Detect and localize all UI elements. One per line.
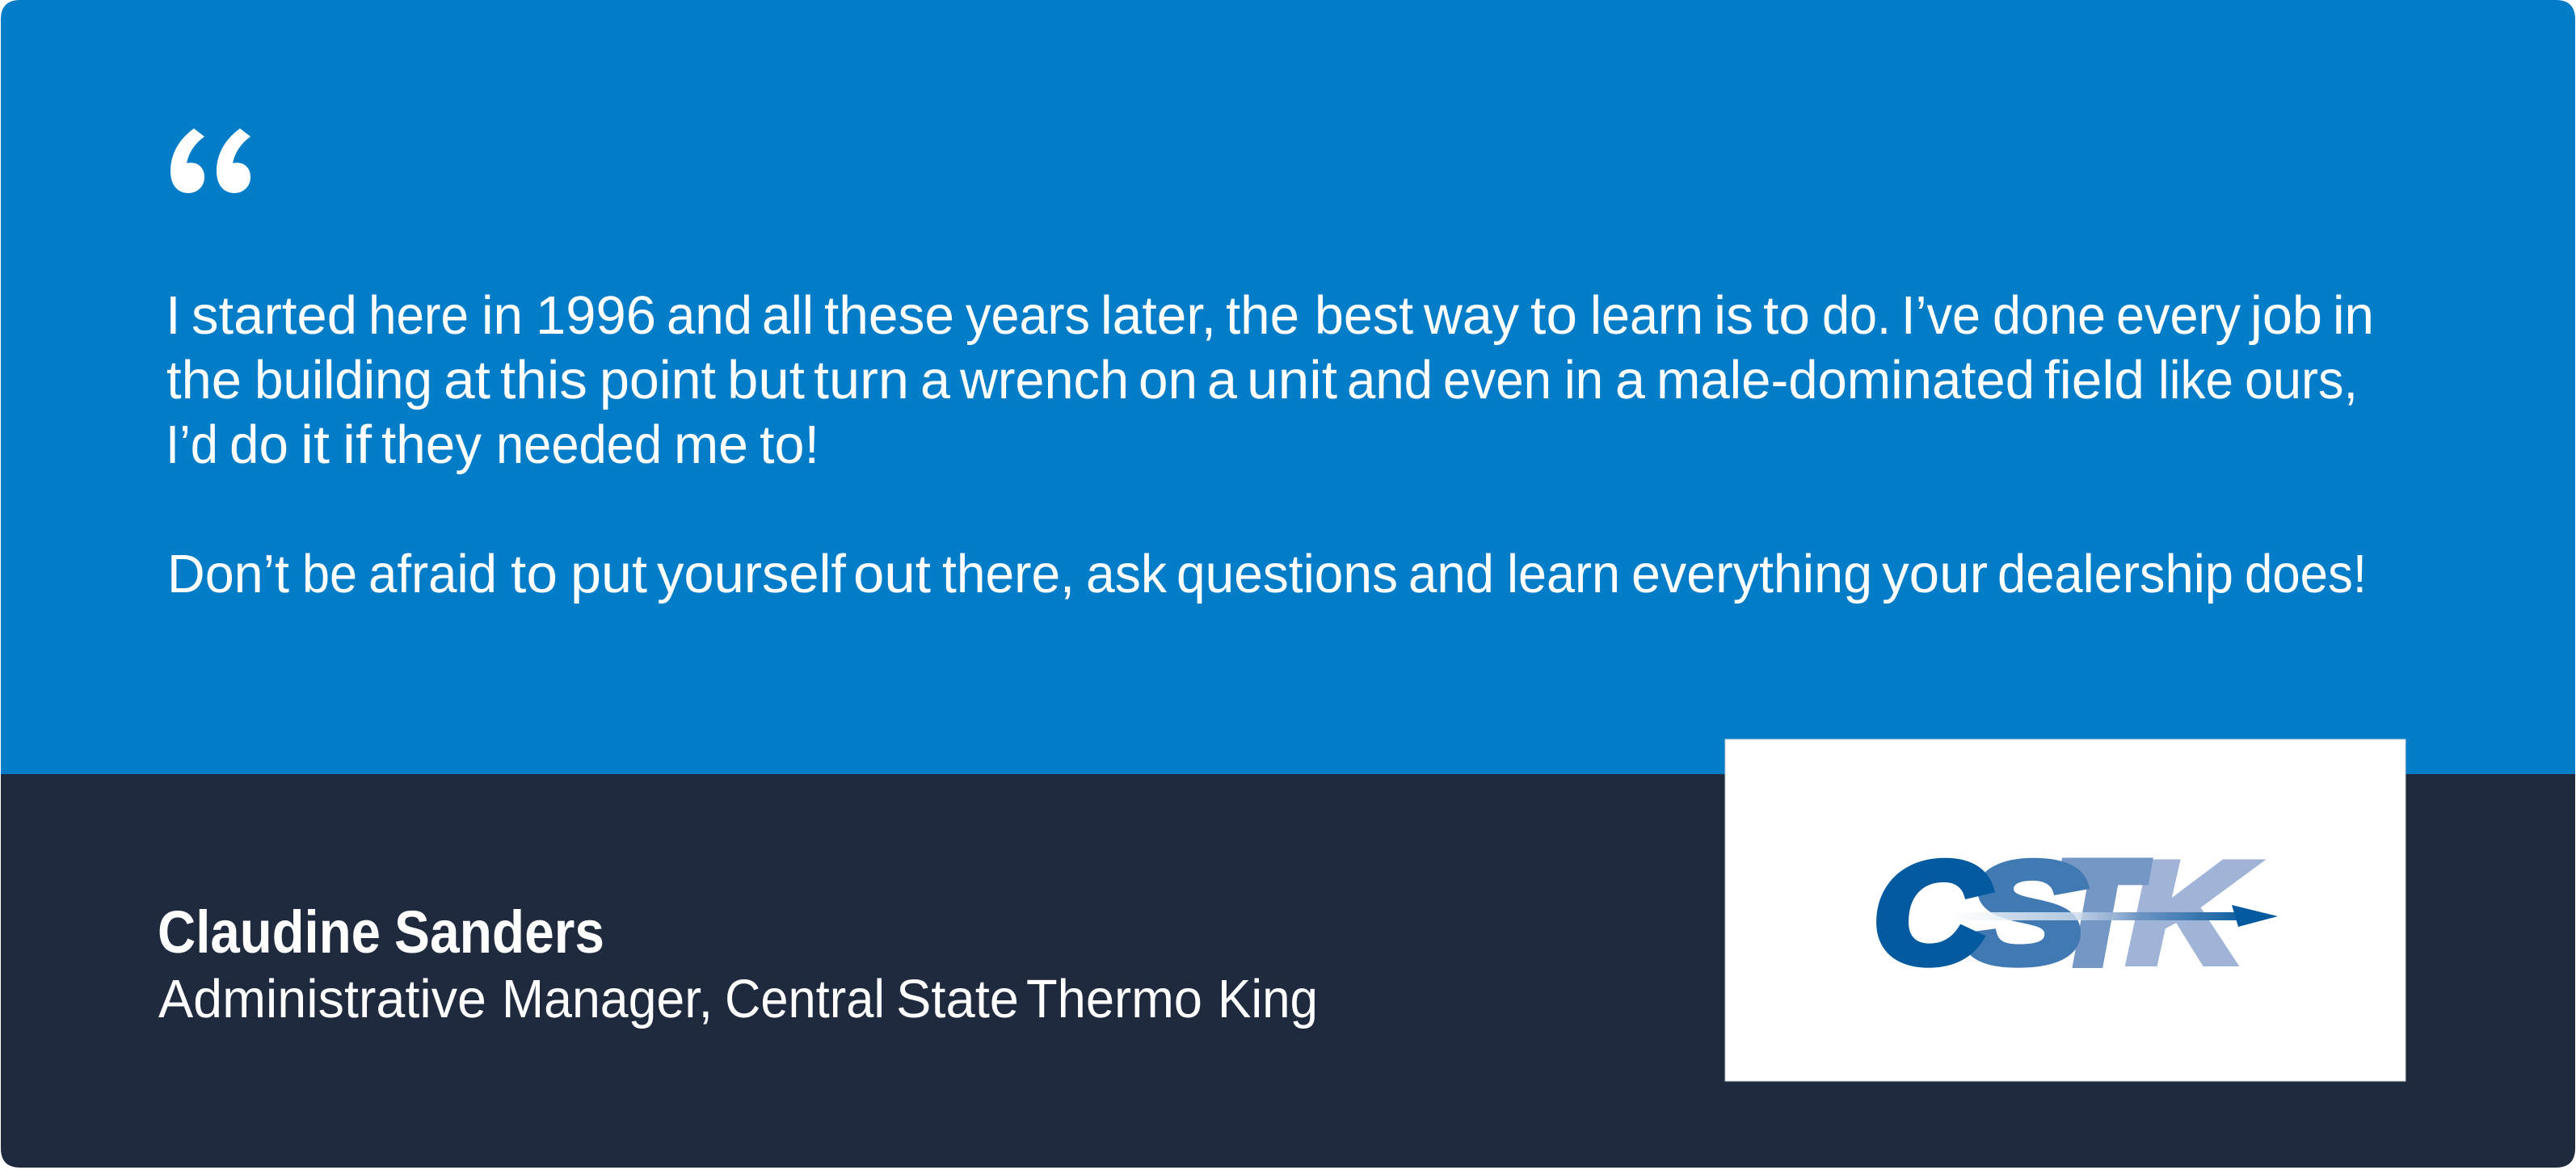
quote paragraph one: in <box>482 285 523 346</box>
quote paragraph one: here <box>368 285 469 346</box>
quote paragraph one: do. <box>1822 285 1891 346</box>
person job title: Administrative <box>158 969 486 1029</box>
quote paragraph one: way <box>1423 285 1519 346</box>
panel: quote background <box>1 0 2575 774</box>
quote paragraph one: learn <box>1590 285 1703 346</box>
quote paragraph one <box>166 285 2374 475</box>
quote paragraph one: a <box>920 350 951 410</box>
quote paragraph one: job <box>2249 285 2322 346</box>
quote paragraph one: I’ve <box>1901 285 1980 346</box>
quote paragraph two: ask <box>1086 544 1167 604</box>
quote paragraph one: field <box>2044 350 2145 410</box>
quote paragraph one: and <box>1347 350 1433 410</box>
logo: CSTK wordmark: S <box>1964 832 2086 993</box>
person name: Claudine <box>158 899 381 966</box>
quote paragraph two: afraid <box>368 544 497 604</box>
quote paragraph one: it <box>301 415 330 475</box>
quote paragraph one: point <box>600 350 716 410</box>
quote paragraph one: to <box>1763 285 1810 346</box>
quote paragraph one: if <box>343 415 372 475</box>
quote paragraph one: in <box>1564 350 1603 410</box>
quote paragraph one: even <box>1443 350 1551 410</box>
quote paragraph one: every <box>2116 285 2241 346</box>
quote paragraph two: and <box>1408 544 1494 604</box>
quote paragraph one: this <box>500 350 587 410</box>
quote paragraph one: a <box>1615 350 1646 410</box>
quote paragraph one: ours, <box>2245 350 2358 410</box>
person job title: Manager, <box>502 969 713 1029</box>
quote paragraph one: the <box>166 350 242 410</box>
quote paragraph two: Don’t <box>167 544 289 604</box>
quote paragraph one: these <box>824 285 954 346</box>
quote paragraph one: needed <box>496 415 662 475</box>
quote paragraph one: later, <box>1101 285 1216 346</box>
quote paragraph two: everything <box>1631 544 1872 604</box>
quote paragraph one: a <box>1207 350 1238 410</box>
person job title: Central <box>725 969 885 1029</box>
quote paragraph two: yourself <box>657 544 846 604</box>
quote paragraph one: I’d <box>166 415 218 475</box>
quote paragraph one: unit <box>1247 350 1337 410</box>
quote text <box>166 285 2374 604</box>
quote paragraph one: best <box>1315 285 1413 346</box>
quote paragraph two: be <box>302 544 357 604</box>
quote paragraph two: to <box>511 544 558 604</box>
logo: CSTK wordmark: K <box>2128 832 2254 993</box>
quote paragraph one: turn <box>814 350 909 410</box>
quote paragraph one: like <box>2158 350 2233 410</box>
quote paragraph two: questions <box>1176 544 1398 604</box>
quote paragraph two: learn <box>1507 544 1620 604</box>
quote paragraph one: years <box>966 285 1090 346</box>
person name: Sanders <box>394 899 604 966</box>
person job title: State <box>896 969 1019 1029</box>
quote paragraph one: at <box>444 350 490 410</box>
quote paragraph two: put <box>570 544 647 604</box>
quote paragraph one: wrench <box>959 350 1129 410</box>
quote paragraph one: I <box>166 285 181 346</box>
quote paragraph two: there, <box>942 544 1075 604</box>
quote paragraph one: male-dominated <box>1656 350 2035 410</box>
quote paragraph two: your <box>1882 544 1988 604</box>
person job title: King <box>1218 969 1318 1029</box>
quote paragraph one: is <box>1714 285 1753 346</box>
quote paragraph one: the <box>1226 285 1299 346</box>
quote paragraph one: started <box>192 285 357 346</box>
quote paragraph one: all <box>762 285 814 346</box>
logo box <box>1725 739 2406 1081</box>
quote paragraph two: dealership <box>1997 544 2233 604</box>
quote paragraph two: out <box>853 544 931 604</box>
quote paragraph one: do <box>229 415 288 475</box>
quote paragraph one: but <box>727 350 805 410</box>
panel: attribution background <box>1 774 2575 1168</box>
logo: arrow <box>1947 905 2278 927</box>
quote paragraph one: to! <box>760 415 819 475</box>
quote paragraph one: me <box>674 415 748 475</box>
quote paragraph one: on <box>1139 350 1198 410</box>
quote paragraph one: building <box>255 350 432 410</box>
icon: opening quotation mark <box>170 128 250 193</box>
quote paragraph one: to <box>1530 285 1577 346</box>
quote paragraph one: 1996 <box>536 285 656 346</box>
person job title: Thermo <box>1026 969 1202 1029</box>
logo: CSTK wordmark: C <box>1873 832 1990 993</box>
logo: CSTK wordmark: T <box>2054 832 2148 993</box>
quote paragraph two: does! <box>2245 544 2367 604</box>
quote paragraph one: they <box>381 415 482 475</box>
quote paragraph one: done <box>1993 285 2106 346</box>
logo: CSTK wordmark <box>1873 832 2254 993</box>
quote paragraph one: and <box>667 285 752 346</box>
quote paragraph one: in <box>2333 285 2374 346</box>
